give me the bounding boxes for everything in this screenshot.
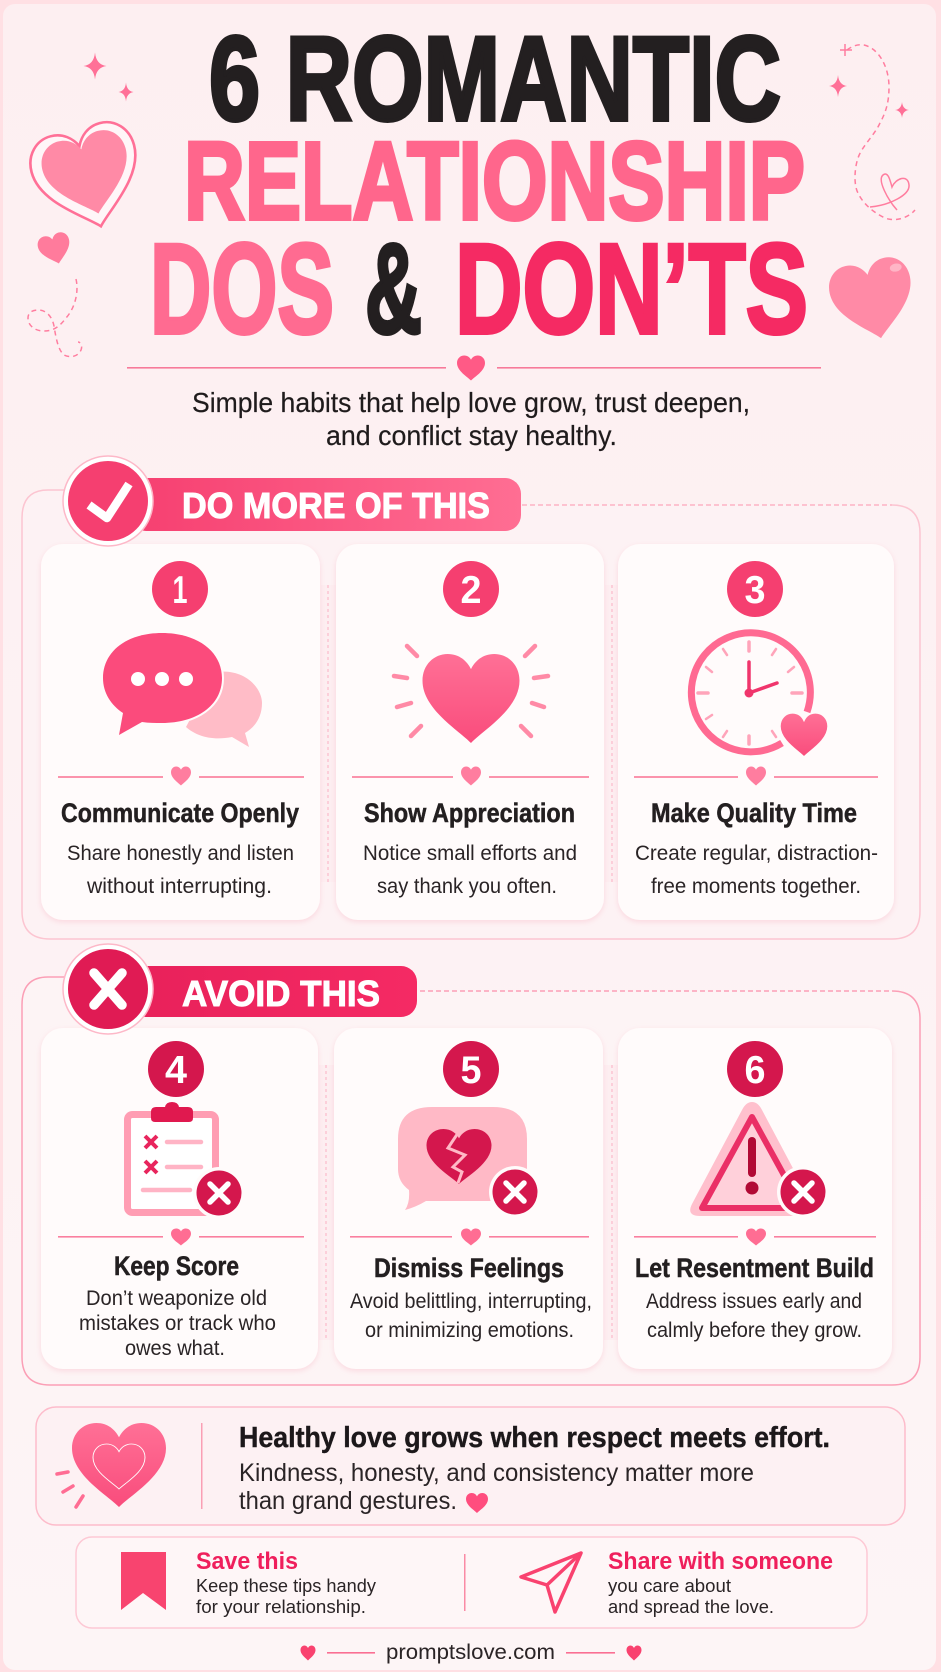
number 2: 2 [460,569,482,612]
heading: Show Appreciation [364,798,575,828]
icon: small heart [466,1493,488,1513]
divider with heart [352,766,589,786]
separators between avoid cards [319,1065,618,1340]
callout heading: Healthy love grows when respect meets effort. [239,1422,830,1454]
icon: chat bubbles [103,633,262,747]
icon: clock with heart [691,633,828,757]
description: Address issues early and [646,1290,862,1313]
description: say thank you often. [377,875,557,898]
icon: large outlined heart left [24,116,152,240]
card 6: let resentment build [618,1028,892,1369]
heading: Keep Score [114,1251,239,1281]
number 1 [152,561,208,617]
subtitle: Simple habits that help love grow, trust deepen, [192,387,750,418]
number 3 [727,561,783,617]
icon: large heart right [825,253,921,347]
share text: and spread the love. [608,1597,774,1617]
callout text: Kindness, honesty, and consistency matter more [239,1459,754,1487]
callout text: than grand gestures. [239,1487,457,1515]
title: DON’TS [455,218,808,361]
card 4: keep score [41,1028,318,1369]
icon: broken heart bubble [398,1107,541,1218]
share text [608,1548,833,1617]
subtitle: and conflict stay healthy. [326,420,617,451]
callout: healthy love [36,1407,905,1525]
panel: do more of this [22,490,920,939]
divider with heart [634,766,878,786]
description: Create regular, distraction- [635,842,878,865]
heading ribbon: do more of this [130,478,521,531]
panel: avoid this [22,977,920,1385]
description: calmly before they grow. [647,1319,862,1342]
number 3: 3 [744,569,766,612]
heading ribbon: do more of this: DO MORE OF THIS [182,485,490,526]
dashed swirl left [28,279,82,357]
callout text [239,1459,754,1515]
icon: small heart left [36,230,74,268]
divider with heart [634,1228,876,1246]
title: DOS [150,218,334,361]
footer: promptslove.com [386,1641,555,1664]
title divider [127,356,821,380]
icon: sparkles left [84,52,134,102]
number 4: 4 [165,1049,187,1092]
icon: paper plane [521,1553,581,1612]
heading ribbon: avoid this: AVOID THIS [182,973,380,1014]
icon: heart with outline [57,1423,166,1507]
share text: you care about [608,1576,731,1596]
number 5: 5 [460,1049,482,1092]
title: 6 ROMANTIC [209,12,781,146]
heading ribbon: avoid this [130,966,417,1017]
number 6: 6 [744,1049,766,1092]
description [79,1287,276,1360]
description: without interrupting. [86,875,272,898]
save text: Keep these tips handy [196,1576,376,1596]
icon: check badge [63,456,153,546]
heading: Let Resentment Build [635,1253,874,1283]
description [646,1290,862,1342]
description: Share honestly and listen [67,842,294,865]
icon: warning triangle [690,1102,829,1218]
divider with heart [350,1228,589,1246]
card 3: make quality time [618,544,894,920]
footer [300,1641,642,1664]
save text [196,1548,376,1617]
divider with heart [58,1228,304,1246]
number 1: 1 [172,569,188,612]
icon: x badge [63,944,153,1034]
heading: Dismiss Feelings [374,1253,564,1283]
description [635,842,878,898]
card 2: show appreciation [336,544,604,920]
separators between do cards [321,585,618,882]
icon: glowing heart [394,646,548,743]
panel: save and share [76,1537,867,1628]
description: Don’t weaponize old [86,1287,267,1310]
description: mistakes or track who [79,1312,276,1335]
icon: clipboard with x [128,1102,245,1219]
title: & [365,218,422,361]
dashed swirl right [840,44,915,220]
icon: bookmark [121,1552,166,1610]
title [150,12,808,361]
save text: for your relationship. [196,1597,366,1617]
share text: Share with someone [608,1548,833,1575]
icon: sparkles right [829,75,909,118]
card 5: dismiss feelings [334,1028,603,1369]
number 5 [443,1041,499,1097]
card 1: communicate openly [41,544,320,920]
description [363,842,577,898]
description [67,842,294,898]
number 4 [148,1041,204,1097]
subtitle [192,387,750,451]
number 6 [727,1041,783,1097]
divider with heart [58,766,304,786]
number 2 [443,561,499,617]
description: Notice small efforts and [363,842,577,865]
save text: Save this [196,1548,298,1575]
description: free moments together. [651,875,861,898]
description: Avoid belittling, interrupting, [350,1290,592,1313]
description: owes what. [125,1337,225,1360]
description: or minimizing emotions. [365,1319,574,1342]
description [350,1290,592,1342]
heading: Make Quality Time [651,798,857,828]
heading: Communicate Openly [61,798,299,828]
